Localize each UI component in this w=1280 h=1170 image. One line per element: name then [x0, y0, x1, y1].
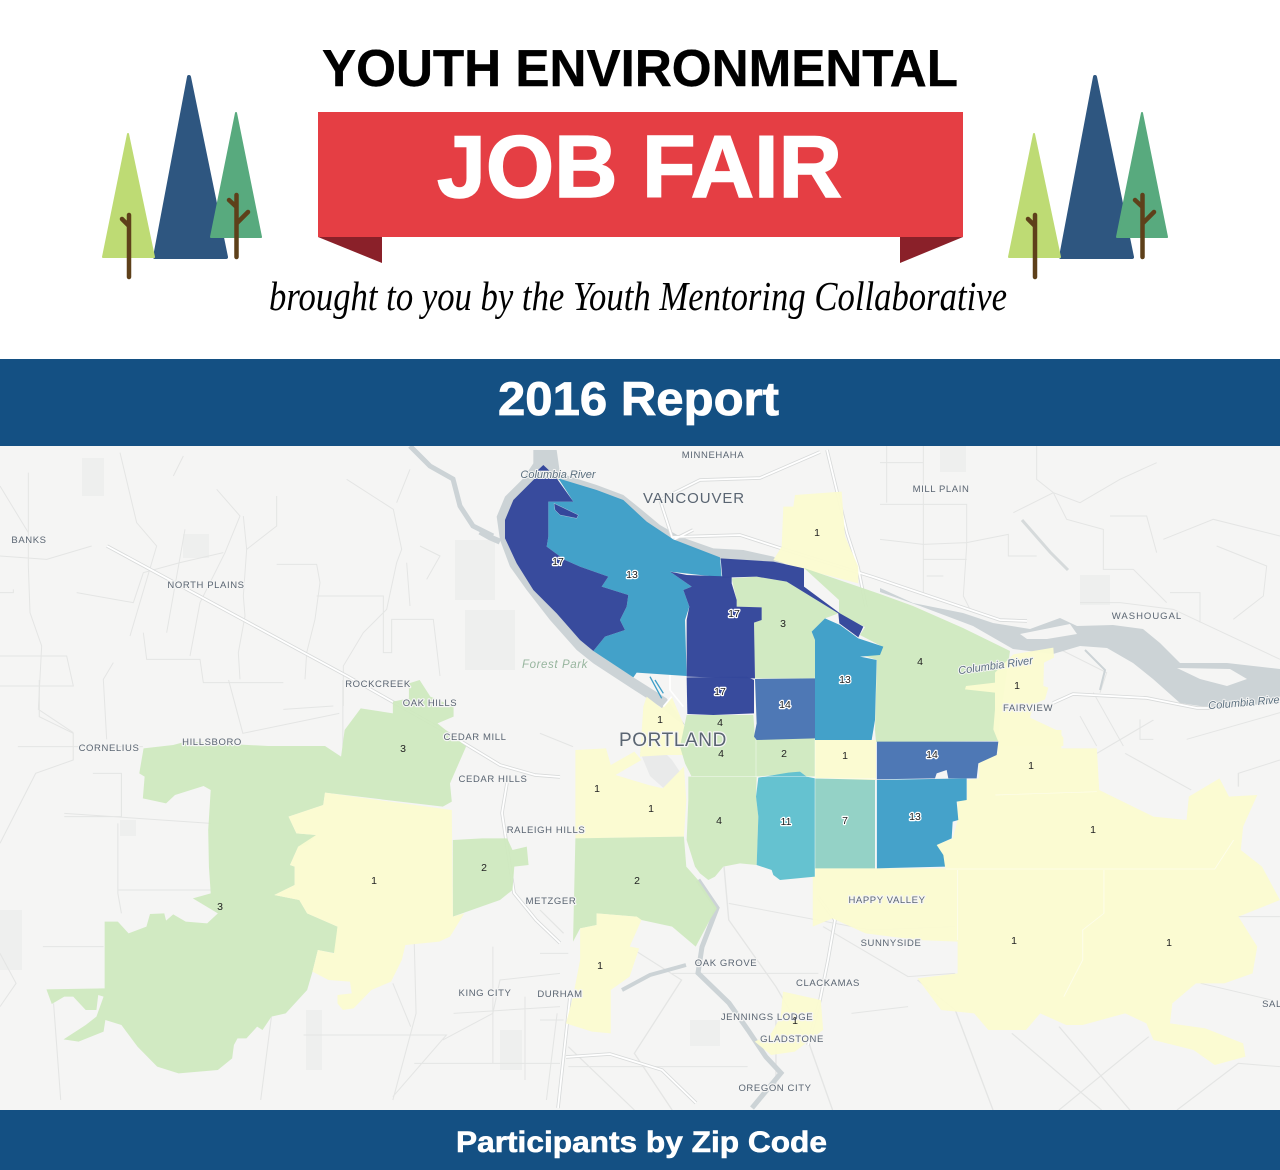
participant counts by zip: 1 — [1166, 937, 1172, 949]
map place labels: METZGER — [526, 896, 576, 907]
banner: Job Fair ribbon: JOB FAIR — [437, 117, 842, 216]
map place labels: OAK GROVE — [695, 958, 757, 969]
map place labels: CLACKAMAS — [796, 978, 860, 989]
map place labels: ROCKCREEK — [345, 679, 411, 690]
map place labels: Columbia River — [958, 655, 1035, 677]
participant counts by zip: 13 — [909, 811, 921, 823]
zip: north Portland darkest blocks — [505, 462, 883, 740]
map place labels: HAPPY VALLEY — [848, 895, 926, 906]
participant counts by zip: 3 — [780, 618, 786, 630]
icon: right trees — [1009, 77, 1167, 277]
zip: southwest Portland areas — [566, 730, 1280, 1065]
participant counts by zip: 4 — [717, 717, 723, 729]
header — [103, 40, 1167, 319]
map place labels: JENNINGS LODGE — [721, 1012, 813, 1023]
participant counts by zip: 1 — [648, 803, 654, 815]
zip: large east green 4 — [804, 568, 1010, 742]
participant counts by zip: 1 — [1014, 680, 1020, 692]
participant counts by zip: 2 — [781, 748, 787, 760]
participant counts by zip: 17 — [728, 608, 740, 620]
participant counts by zip: 14 — [926, 749, 938, 761]
map place labels: WASHOUGAL — [1112, 611, 1182, 622]
map place labels: RALEIGH HILLS — [507, 825, 585, 836]
participant counts by zip: 1 — [1011, 935, 1017, 947]
zip: north yellow and green 3 — [640, 492, 858, 757]
participant counts by zip: 17 — [552, 556, 564, 568]
choropleth zip code areas — [46, 462, 1280, 1073]
participant counts by zip: 4 — [718, 748, 724, 760]
participant counts by zip: 2 — [481, 862, 487, 874]
band: Participants by Zip Code: Participants by Zip Code — [456, 1126, 827, 1159]
map place labels: NORTH PLAINS — [167, 580, 245, 591]
participant counts by zip: 1 — [1028, 760, 1034, 772]
zip: inner east blocks — [680, 677, 998, 880]
map place labels: GLADSTONE — [760, 1034, 824, 1045]
participant counts by zip: 13 — [626, 569, 638, 581]
band: Participants by Zip Code — [0, 1110, 1280, 1170]
map place labels: HILLSBORO — [182, 737, 242, 748]
map place labels: FAIRVIEW — [1003, 703, 1053, 714]
participant counts by zip: 1 — [842, 750, 848, 762]
participant counts by zip: 4 — [716, 815, 722, 827]
map place labels: SUNNYSIDE — [861, 938, 921, 949]
subtitle: brought to you by the Youth Mentoring Collaborative — [269, 273, 1007, 319]
banner: Job Fair ribbon — [318, 112, 963, 263]
participant counts by zip: 7 — [842, 815, 848, 827]
highways — [107, 450, 1213, 1108]
map place labels: OAK HILLS — [403, 698, 457, 709]
map place labels: VANCOUVER — [643, 490, 745, 507]
participant counts by zip: 17 — [714, 686, 726, 698]
map place labels: BANKS — [11, 535, 47, 546]
map place labels: PORTLAND — [619, 730, 727, 751]
Columbia River and Willamette — [410, 446, 1280, 1108]
participant counts by zip: 3 — [217, 901, 223, 913]
participant counts by zip: 1 — [792, 1015, 798, 1027]
participant counts by zip — [217, 527, 1172, 1027]
map place labels: DURHAM — [537, 989, 583, 1000]
heading: Youth Environmental: YOUTH ENVIRONMENTAL — [322, 40, 958, 98]
zip: far west, 3 participants — [46, 680, 529, 1073]
participant counts by zip: 14 — [779, 699, 791, 711]
map place labels: CEDAR HILLS — [459, 774, 527, 785]
participant counts by zip: 1 — [371, 875, 377, 887]
map place labels: OREGON CITY — [738, 1083, 812, 1094]
participant counts by zip: 1 — [597, 960, 603, 972]
participant counts by zip: 4 — [917, 656, 923, 668]
map place labels: MILL PLAIN — [913, 484, 969, 495]
map place labels: CEDAR MILL — [443, 732, 507, 743]
participant counts by zip: 1 — [594, 783, 600, 795]
map place labels: Columbia River — [520, 469, 597, 481]
participant counts by zip: 13 — [839, 674, 851, 686]
participant counts by zip: 1 — [814, 527, 820, 539]
map place labels: MINNEHAHA — [682, 450, 744, 461]
participant counts by zip: 1 — [1090, 824, 1096, 836]
map place labels — [11, 450, 1280, 1094]
map place labels: Forest Park — [522, 659, 589, 671]
band: 2016 Report: 2016 Report — [498, 372, 779, 425]
zip: Fairview yellow — [965, 648, 1063, 746]
map place labels: KING CITY — [459, 988, 512, 999]
map place labels: CORNELIUS — [79, 743, 139, 754]
zip: west yellow, 1 participant — [274, 793, 464, 1010]
participant counts by zip: 3 — [400, 743, 406, 755]
participant counts by zip: 11 — [781, 816, 792, 828]
participant counts by zip: 1 — [657, 714, 663, 726]
icon: left trees — [103, 77, 261, 277]
band: 2016 Report — [0, 359, 1280, 446]
map panel: participants by zip code — [0, 446, 1280, 1110]
minor roads — [0, 446, 1280, 1110]
participant counts by zip: 2 — [634, 875, 640, 887]
